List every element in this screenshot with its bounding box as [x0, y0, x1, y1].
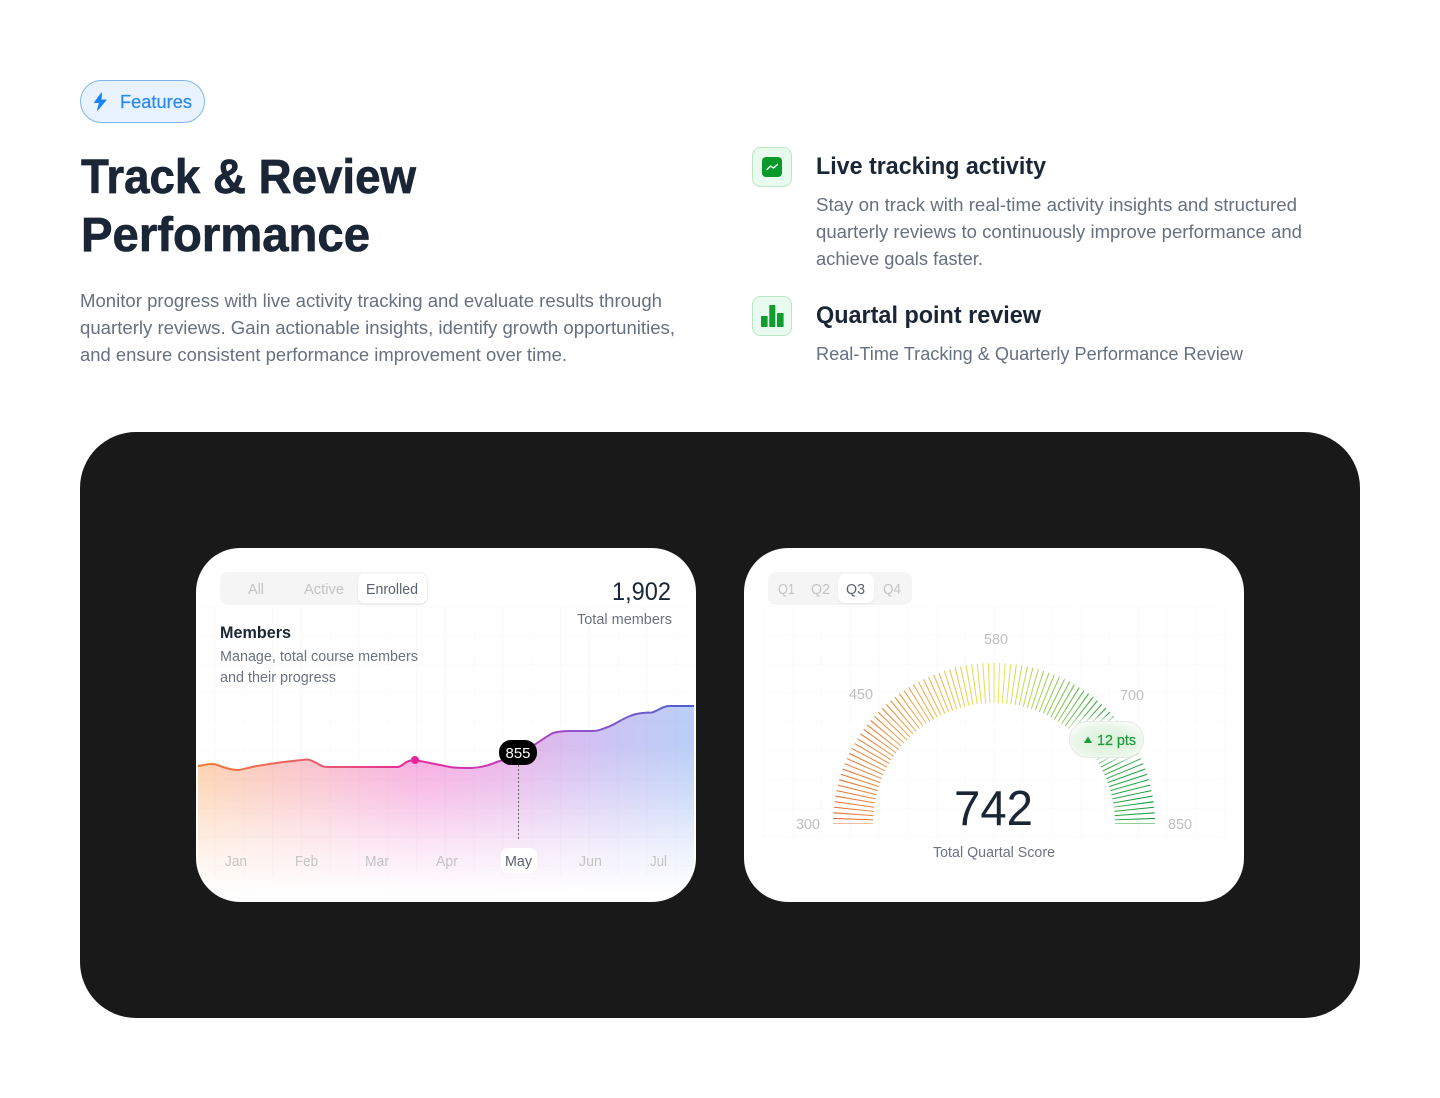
score badge: 12 pts: [1066, 718, 1147, 761]
gauge grid: [763, 606, 1227, 838]
month axis: Jul: [650, 854, 667, 870]
description: Real-Time Tracking & Quarterly Performance Review: [816, 343, 1244, 364]
icon: activity chart: [752, 148, 792, 186]
badge: Features: [80, 80, 204, 122]
gauge scale labels: 850: [1168, 817, 1192, 833]
gauge scale labels: [796, 632, 1192, 833]
quarter tabs: Q1: [778, 582, 795, 598]
description: Stay on track with real-time activity insights and structured: [816, 194, 1297, 215]
month axis: May: [505, 854, 533, 870]
members heading and description: Manage, total course members: [220, 649, 418, 665]
chart grid: [198, 606, 694, 876]
intro paragraph: and ensure consistent performance improvement over time.: [80, 344, 567, 365]
feature: quartal point review: [752, 296, 1244, 364]
heading: Live tracking activity: [816, 153, 1047, 180]
month axis: [225, 848, 667, 873]
quarter tabs: Q3: [846, 582, 865, 598]
icon: bar chart: [752, 296, 792, 336]
month axis: Jan: [225, 854, 247, 870]
filter tabs: Active: [304, 582, 344, 598]
filter tabs: All: [248, 582, 264, 598]
dashed guide: [518, 765, 520, 840]
gauge ticks: [853, 683, 1135, 824]
title: [81, 151, 417, 262]
month axis: Feb: [295, 854, 318, 870]
feature: live tracking activity: [752, 148, 1302, 269]
tooltip: 855: [499, 740, 537, 765]
area chart: [198, 705, 694, 877]
trend line: [198, 706, 694, 770]
description: quarterly reviews to continuously improve performance and: [816, 221, 1302, 242]
description: achieve goals faster.: [816, 248, 983, 269]
total members stat: [577, 578, 672, 628]
tooltip: 855: 855: [506, 746, 530, 762]
members heading and description: [220, 624, 418, 686]
intro paragraph: [80, 290, 675, 365]
quarter tabs: Q2: [811, 582, 830, 598]
score badge: 12 pts: 12 pts: [1097, 733, 1136, 749]
month axis: Apr: [436, 854, 458, 870]
badge label: Features: [120, 91, 192, 112]
month axis: Mar: [365, 854, 389, 870]
gauge scale labels: 450: [849, 687, 873, 703]
gauge scale labels: 700: [1120, 688, 1144, 704]
panel: dark showcase: [80, 432, 1360, 1018]
total members stat: Total members: [577, 612, 672, 628]
title: Track & Review: [81, 151, 417, 204]
intro paragraph: Monitor progress with live activity tracking and evaluate results through: [80, 290, 662, 311]
gauge scale labels: 300: [796, 817, 820, 833]
filter tabs: [220, 572, 428, 605]
card: members chart: [196, 548, 696, 902]
score value: 742: [954, 782, 1033, 836]
quarter tabs: Q4: [883, 582, 901, 598]
intro paragraph: quarterly reviews. Gain actionable insights, identify growth opportunities,: [80, 317, 675, 338]
members heading and description: and their progress: [220, 670, 336, 686]
quarter tabs: [768, 572, 912, 605]
icon: lightning bolt: [94, 93, 106, 110]
card: quarterly score gauge: [744, 548, 1244, 902]
title: Performance: [81, 209, 370, 262]
marker dot: [411, 756, 419, 764]
description: [816, 194, 1302, 269]
members heading and description: Members: [220, 624, 291, 642]
heading: Quartal point review: [816, 302, 1041, 329]
filter tabs: Enrolled: [366, 582, 418, 598]
month axis: Jun: [579, 854, 602, 870]
score caption: Total Quartal Score: [933, 845, 1055, 861]
total members stat: 1,902: [612, 578, 671, 606]
gauge scale labels: 580: [984, 632, 1008, 648]
